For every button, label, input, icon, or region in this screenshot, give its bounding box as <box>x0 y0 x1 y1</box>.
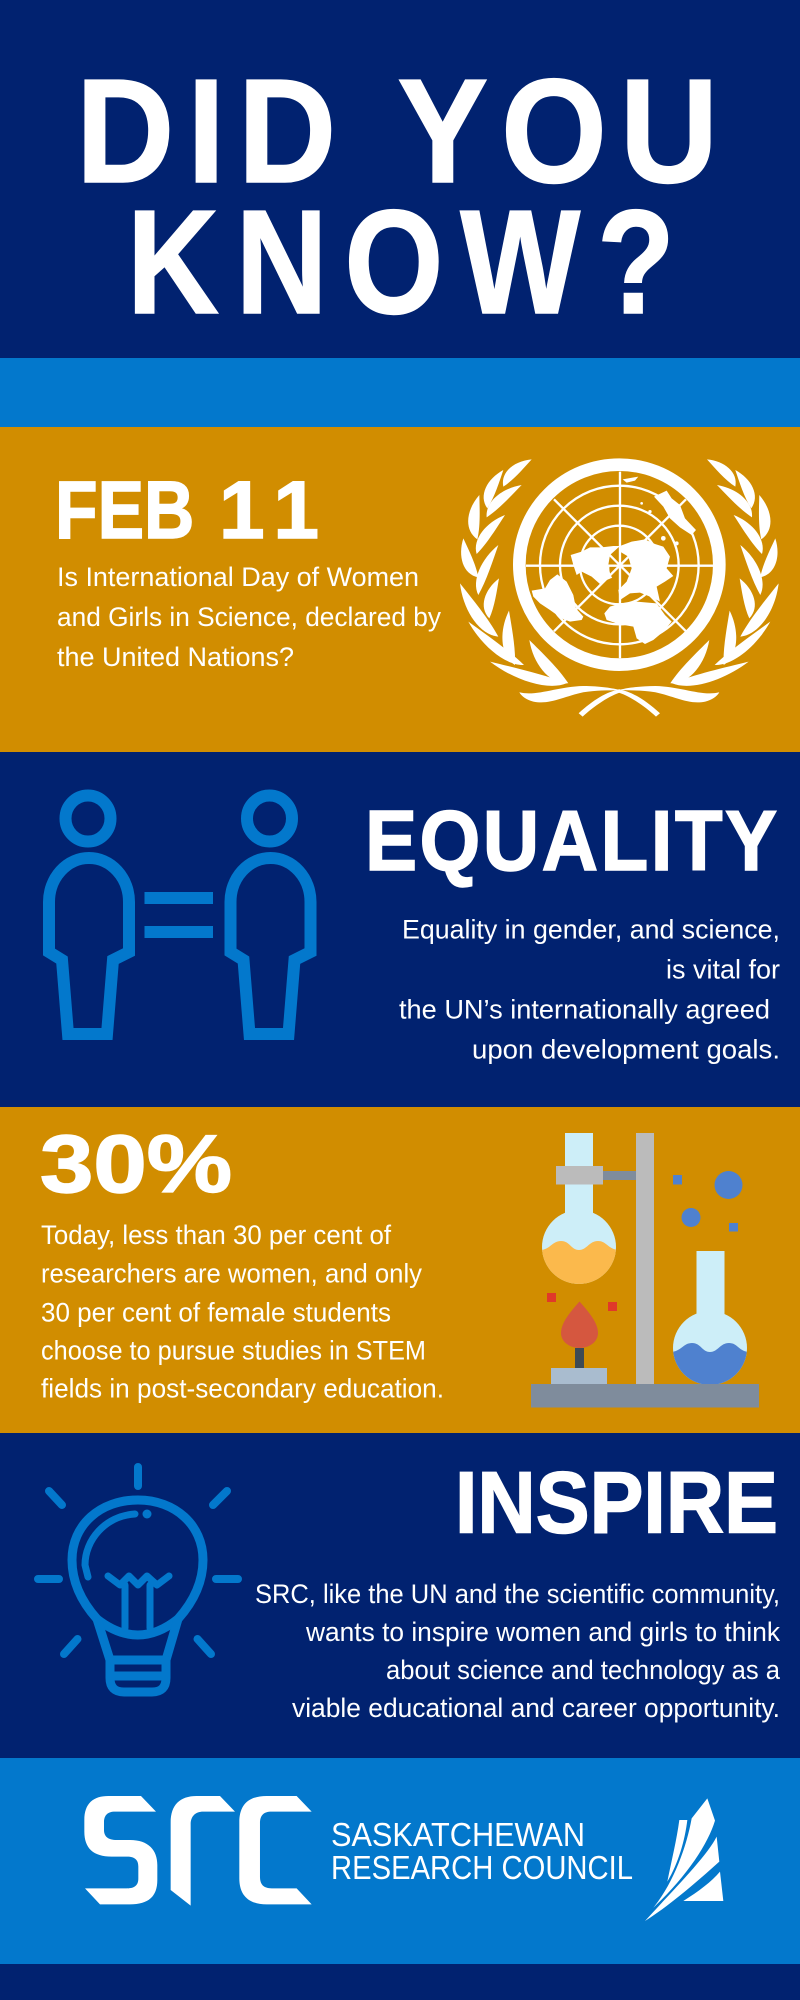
heading: INSPIRE: INSPIRE <box>455 1454 778 1552</box>
text: inspire description: SRC, like the UN and the scientific community, <box>255 1579 780 1609</box>
heading: FEB 11: 11 <box>219 465 319 556</box>
logo: sail mark <box>645 1798 723 1921</box>
text: inspire description: about science and technology as a <box>386 1655 781 1685</box>
title <box>76 49 718 345</box>
title: DID YOU <box>76 49 718 214</box>
heading: FEB 11: FEB <box>55 465 194 556</box>
emblem globe <box>519 465 719 665</box>
emblem left wreath <box>452 453 622 717</box>
heading: 30%: 30% <box>40 1119 232 1210</box>
text: equality description: Equality in gender, and science, <box>402 914 780 944</box>
panel: 30% background <box>0 1107 800 1433</box>
text: 30% description: choose to pursue studies in STEM <box>41 1336 426 1366</box>
text: equality description: upon development goals. <box>472 1034 780 1064</box>
text: FEB 11 description <box>57 562 441 672</box>
text: FEB 11 description: and Girls in Science, declared by <box>57 602 441 632</box>
text: 30% description: 30 per cent of female students <box>41 1298 391 1328</box>
logo: Saskatchewan Research Council wordmark: SASKATCHEWAN <box>331 1816 585 1853</box>
text: FEB 11 description: the United Nations? <box>57 642 294 672</box>
icon: United Nations emblem <box>452 453 787 717</box>
title: KNOW? <box>127 180 675 345</box>
panel: FEB 11 background <box>0 427 800 752</box>
emblem right wreath <box>617 453 787 717</box>
panel: footer background <box>0 1758 800 1964</box>
text: FEB 11 description: Is International Day of Women <box>57 562 419 592</box>
text: 30% description: fields in post-secondary education. <box>41 1374 444 1404</box>
text: inspire description <box>255 1579 781 1723</box>
logo: Saskatchewan Research Council wordmark <box>331 1816 633 1886</box>
logo: Saskatchewan Research Council wordmark: RESEARCH COUNCIL <box>331 1849 633 1886</box>
icon: two people with equals sign <box>49 796 310 1034</box>
logo: SRC lettermark <box>84 1796 312 1906</box>
heading: FEB 11 <box>55 465 319 556</box>
heading: EQUALITY: EQUALITY <box>365 794 777 889</box>
text: 30% description: researchers are women, and only <box>41 1258 422 1288</box>
text: equality description <box>399 914 780 1064</box>
text: inspire description: wants to inspire women and girls to think <box>305 1617 780 1647</box>
text: 30% description: Today, less than 30 per cent of <box>41 1220 391 1250</box>
text: inspire description: viable educational and career opportunity. <box>292 1693 780 1723</box>
text: equality description: the UN’s internationally agreed <box>399 994 770 1024</box>
text: 30% description <box>41 1220 444 1404</box>
icon: light bulb <box>38 1467 238 1692</box>
text: equality description: is vital for <box>666 954 780 984</box>
icon: laboratory flasks <box>531 1133 759 1408</box>
blue band <box>0 358 800 427</box>
